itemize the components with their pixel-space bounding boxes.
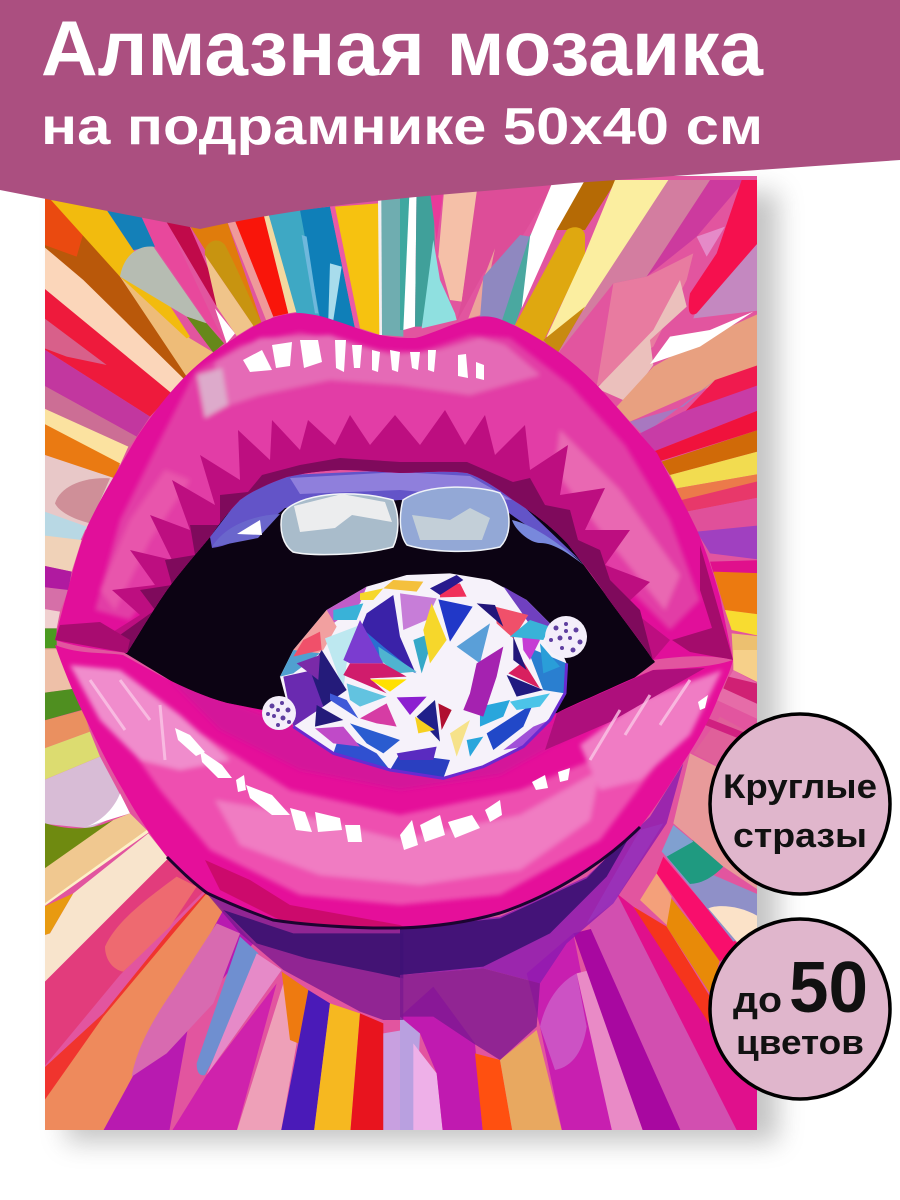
badge: up to 50 colours: 50: [789, 948, 868, 1028]
diamond: [280, 573, 567, 778]
stone left: [262, 696, 296, 730]
upper lip: [55, 313, 733, 660]
badge: round rhinestones: [710, 714, 890, 894]
rays: bottom right quadrant: [400, 650, 763, 1137]
badge: up to 50 colours: [710, 919, 890, 1099]
subtitle: на подрамнике 50х40 см: [41, 98, 763, 156]
painting: diamond in lips: [40, 176, 763, 1137]
lower lip: [55, 645, 733, 935]
rays: bottom left quadrant: [40, 650, 403, 1137]
lip crease shadow: [100, 410, 670, 660]
teeth: [210, 470, 585, 565]
badge: up to 50 colours: цветов: [736, 1024, 864, 1062]
rays: top right quadrant: [400, 180, 763, 663]
stone right: [545, 616, 587, 658]
purple reflection below lips: [207, 763, 683, 1060]
badge: round rhinestones: стразы: [733, 817, 867, 855]
badge: round rhinestones: Круглые: [723, 768, 877, 806]
title: Алмазная мозаика: [41, 4, 764, 92]
canvas drop shadow: [66, 192, 778, 1142]
rays: top left quadrant: [40, 190, 403, 667]
shadow under mouth and diamond: [545, 668, 705, 750]
mouth interior: [124, 484, 655, 714]
header banner: [0, 0, 900, 229]
badge: up to 50 colours: до: [733, 979, 782, 1020]
